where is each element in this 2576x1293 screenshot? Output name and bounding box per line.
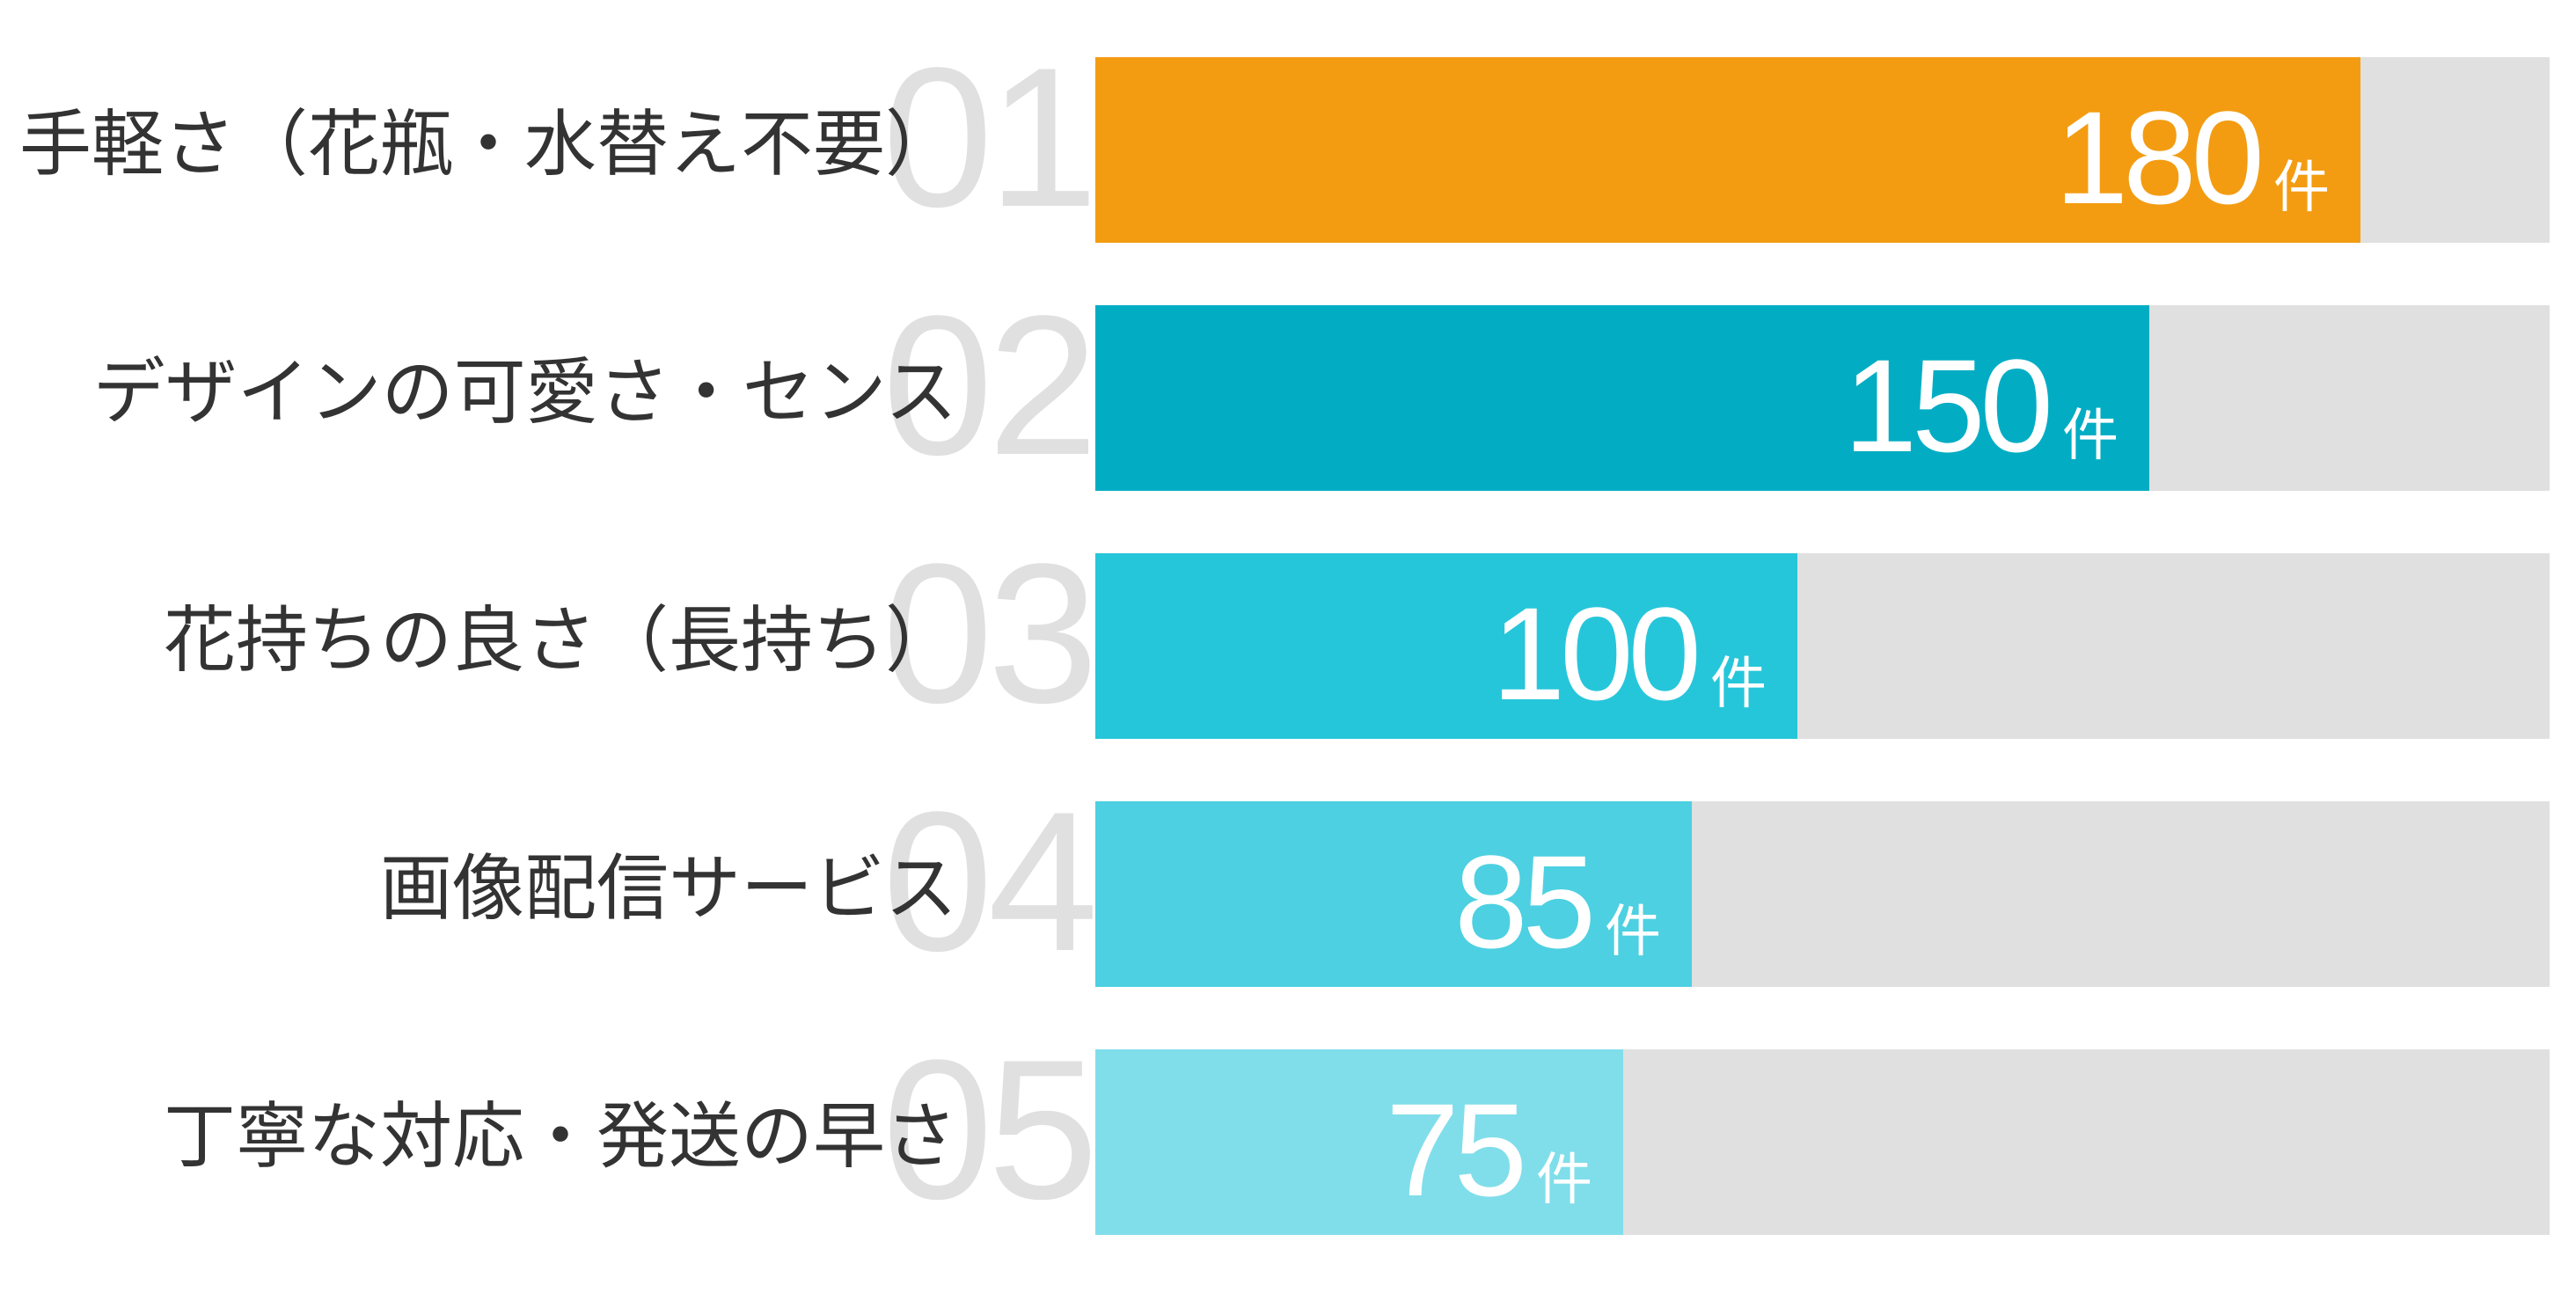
bar 2	[1095, 305, 2149, 491]
value 4	[1454, 828, 1661, 975]
value 4: 件	[1605, 900, 1661, 963]
track 5	[1095, 1049, 2550, 1235]
value 4: 85	[1454, 828, 1591, 975]
label 2: デザインの可愛さ・センス	[93, 353, 957, 433]
bar 5	[1095, 1049, 1623, 1235]
row 5	[164, 1018, 2550, 1240]
label 4: 画像配信サービス	[380, 849, 957, 929]
value 3: 100	[1492, 580, 1696, 727]
value 5: 件	[1536, 1148, 1592, 1211]
rank number 05: 05	[882, 1018, 1093, 1240]
track 1	[1095, 57, 2550, 243]
row 1	[19, 26, 2550, 248]
value 2: 件	[2062, 404, 2119, 467]
bar 3	[1095, 553, 1797, 739]
rank number 01: 01	[882, 26, 1093, 248]
value 2: 150	[1844, 332, 2048, 479]
value 5	[1386, 1076, 1592, 1224]
value 3: 件	[1710, 652, 1767, 715]
row 2	[93, 274, 2550, 496]
label 3: 花持ちの良さ（長持ち）	[164, 601, 957, 681]
value 1: 180	[2055, 84, 2259, 231]
rank number 03: 03	[882, 522, 1093, 744]
value 5: 75	[1386, 1076, 1522, 1224]
bar 4	[1095, 801, 1692, 987]
track 2	[1095, 305, 2550, 491]
label 1: 手軽さ（花瓶・水替え不要）	[19, 105, 957, 185]
rank number 04: 04	[882, 770, 1093, 992]
row 3	[164, 522, 2550, 744]
label 5: 丁寧な対応・発送の早さ	[164, 1097, 957, 1177]
rank number 02: 02	[882, 274, 1093, 496]
value 1: 件	[2273, 156, 2330, 219]
bar 1	[1095, 57, 2360, 243]
track 4	[1095, 801, 2550, 987]
track 3	[1095, 553, 2550, 739]
row 4	[380, 770, 2550, 992]
